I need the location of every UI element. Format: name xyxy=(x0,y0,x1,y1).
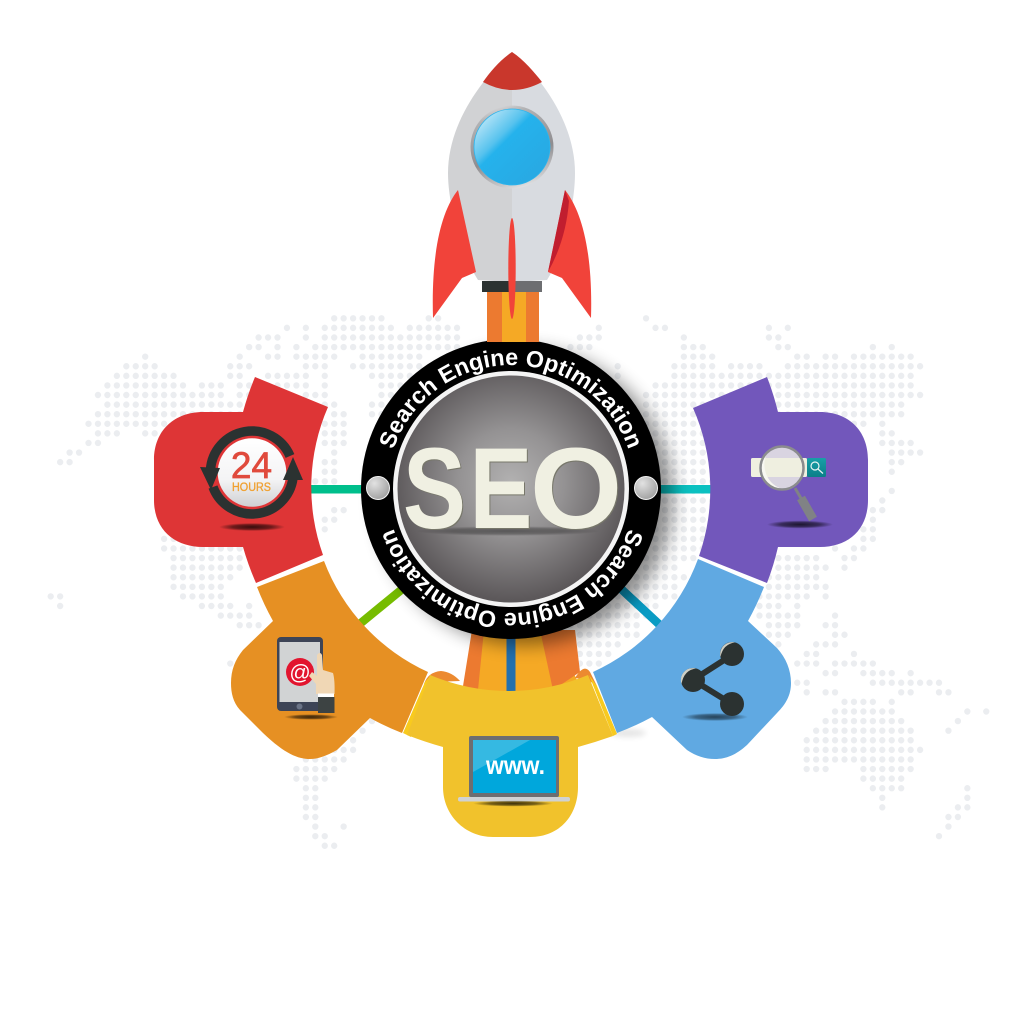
icon shadow: tablet xyxy=(284,714,338,720)
rocket flame core xyxy=(502,290,526,342)
laptop bezel xyxy=(469,736,559,797)
at sign: @ xyxy=(289,662,311,684)
connector: cyan lower right xyxy=(618,586,662,627)
connector: green left xyxy=(305,485,367,494)
right fin xyxy=(548,190,591,318)
connector: blue bottom xyxy=(506,630,516,692)
number 24: 24 xyxy=(231,445,272,486)
connector: teal right xyxy=(655,485,715,494)
icon shadow: clock xyxy=(219,523,285,531)
email badge xyxy=(286,658,314,686)
icon: magnifying glass over search bar xyxy=(751,446,833,528)
button glass xyxy=(811,462,823,474)
label hours: HOURS xyxy=(232,482,271,494)
tablet screen xyxy=(280,642,320,702)
petal: purple search xyxy=(693,377,868,583)
handle xyxy=(795,488,813,519)
SEO word xyxy=(403,424,622,553)
screen glare xyxy=(473,740,530,772)
left fin xyxy=(433,190,476,318)
SEO word: E xyxy=(470,425,532,553)
badge black ring xyxy=(361,339,661,639)
rocket flame xyxy=(487,290,539,342)
home button xyxy=(296,704,302,710)
petal: orange email xyxy=(231,561,428,759)
right fin dark strip xyxy=(548,190,569,272)
lens xyxy=(760,446,804,490)
hub drop shadow xyxy=(377,349,673,645)
rocket body left xyxy=(448,52,512,282)
dotted world map background xyxy=(51,318,986,846)
lens band xyxy=(760,458,804,477)
nose cone xyxy=(483,52,542,90)
search field xyxy=(751,458,807,477)
icon shadow: magnifier xyxy=(767,520,833,528)
porthole glass xyxy=(474,109,550,185)
icon: 24 hours clock xyxy=(200,431,303,531)
sleeve xyxy=(318,697,334,713)
petal: yellow website xyxy=(403,669,617,837)
badge silver ring xyxy=(393,371,629,607)
left screw xyxy=(366,476,390,500)
badge disc xyxy=(398,376,624,602)
share nodes xyxy=(720,642,744,666)
rocket xyxy=(433,52,591,342)
tablet body xyxy=(277,637,323,711)
pointing hand xyxy=(309,653,335,694)
icon: laptop www xyxy=(458,736,570,806)
laptop shadow xyxy=(473,800,553,806)
laptop screen xyxy=(473,740,556,793)
rocket exhaust flame below the hub xyxy=(463,630,580,700)
petal: blue share xyxy=(593,559,791,759)
circular arrows xyxy=(210,431,293,514)
ring text top: Search Engine Optimization xyxy=(380,350,639,448)
icon shadow: share xyxy=(682,713,748,721)
white dial xyxy=(218,438,286,507)
engine band left xyxy=(482,281,512,292)
connector: lime lower left xyxy=(356,586,406,627)
lens frame xyxy=(760,446,804,490)
petal: red 24 hours xyxy=(154,377,328,583)
disc reflection shadow xyxy=(416,526,600,536)
laptop base xyxy=(458,797,570,802)
shirt cuff xyxy=(318,694,334,697)
bottom petal soft shadow xyxy=(610,729,646,737)
icon: tablet with email xyxy=(277,637,338,720)
share links xyxy=(693,655,732,704)
ring text bottom: Search Engine Optimization xyxy=(383,530,642,628)
central SEO badge xyxy=(361,340,661,639)
center fin xyxy=(508,218,516,319)
lens crescent xyxy=(761,453,782,489)
node highlights xyxy=(681,642,735,684)
engine band right xyxy=(512,281,542,292)
www label: www. xyxy=(485,752,545,780)
rocket body right xyxy=(512,52,575,282)
SEO word: O xyxy=(530,424,622,553)
icon: share xyxy=(681,642,748,721)
search button xyxy=(807,458,826,477)
right screw xyxy=(634,476,658,500)
arrow heads xyxy=(200,457,303,490)
SEO word: S xyxy=(403,425,466,553)
porthole frame xyxy=(470,106,554,188)
